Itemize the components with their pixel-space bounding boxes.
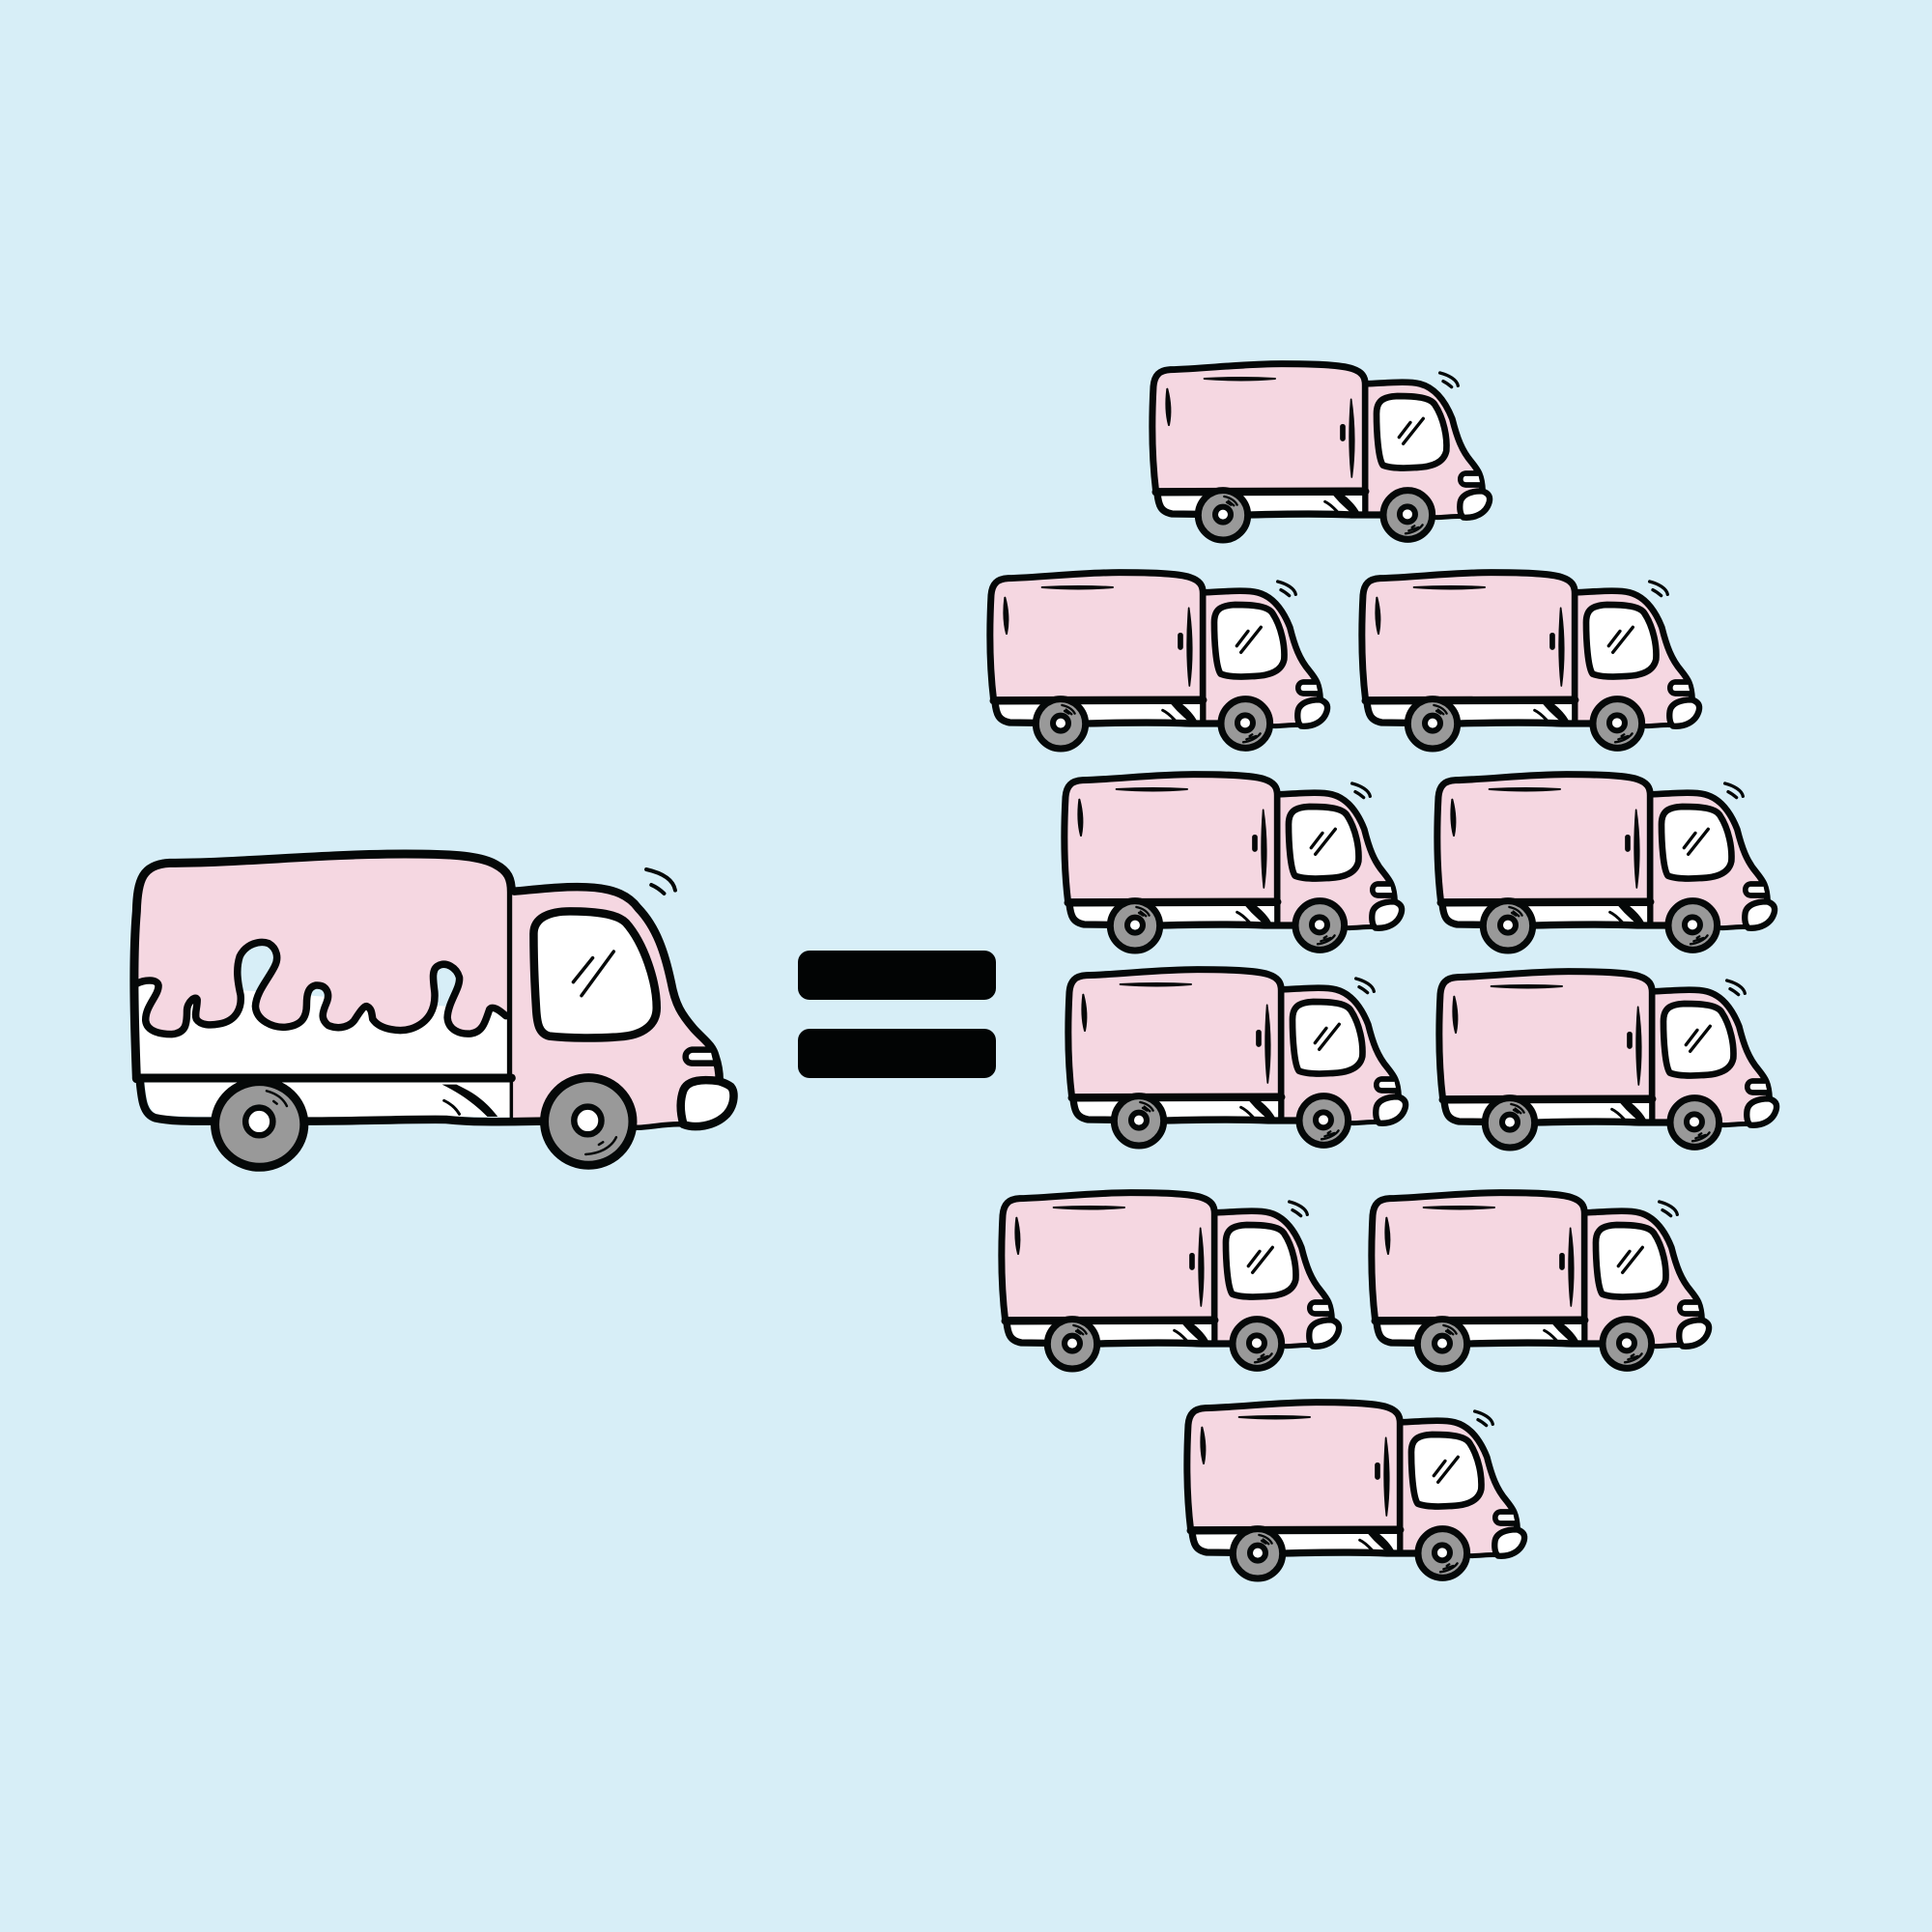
small truck 6 xyxy=(1068,970,1406,1146)
skirt outline xyxy=(140,1080,545,1122)
large truck, partly filled xyxy=(134,854,733,1167)
motion lines xyxy=(646,869,675,894)
rear wheel xyxy=(215,1082,304,1167)
window xyxy=(533,911,657,1037)
small truck 1 xyxy=(1152,364,1490,540)
skirt under box xyxy=(145,1082,510,1119)
small truck 2 xyxy=(990,573,1327,749)
small truck 5 xyxy=(1437,775,1775,951)
cargo box white lower part xyxy=(136,982,508,1079)
small truck 10 xyxy=(1187,1403,1524,1578)
equals top bar xyxy=(798,951,996,1000)
small truck 4 xyxy=(1065,775,1402,951)
small truck 7 xyxy=(1439,972,1776,1148)
equals sign xyxy=(798,951,996,1078)
small truck 8 xyxy=(1002,1193,1339,1369)
group of ten small trucks xyxy=(990,364,1776,1578)
wavy liquid line xyxy=(136,942,506,1035)
cab xyxy=(512,887,720,1127)
cargo fill level: pink with wavy edge xyxy=(136,854,511,1035)
bumper xyxy=(681,1080,733,1126)
front wheel xyxy=(545,1078,633,1165)
bar under box xyxy=(136,1073,511,1082)
equals bottom bar xyxy=(798,1029,996,1078)
headlight xyxy=(686,1050,714,1064)
window glare xyxy=(573,952,613,996)
skirt hatching xyxy=(442,1085,497,1117)
small truck 9 xyxy=(1372,1193,1709,1369)
small truck 3 xyxy=(1362,573,1699,749)
cargo box outline xyxy=(134,854,511,1079)
